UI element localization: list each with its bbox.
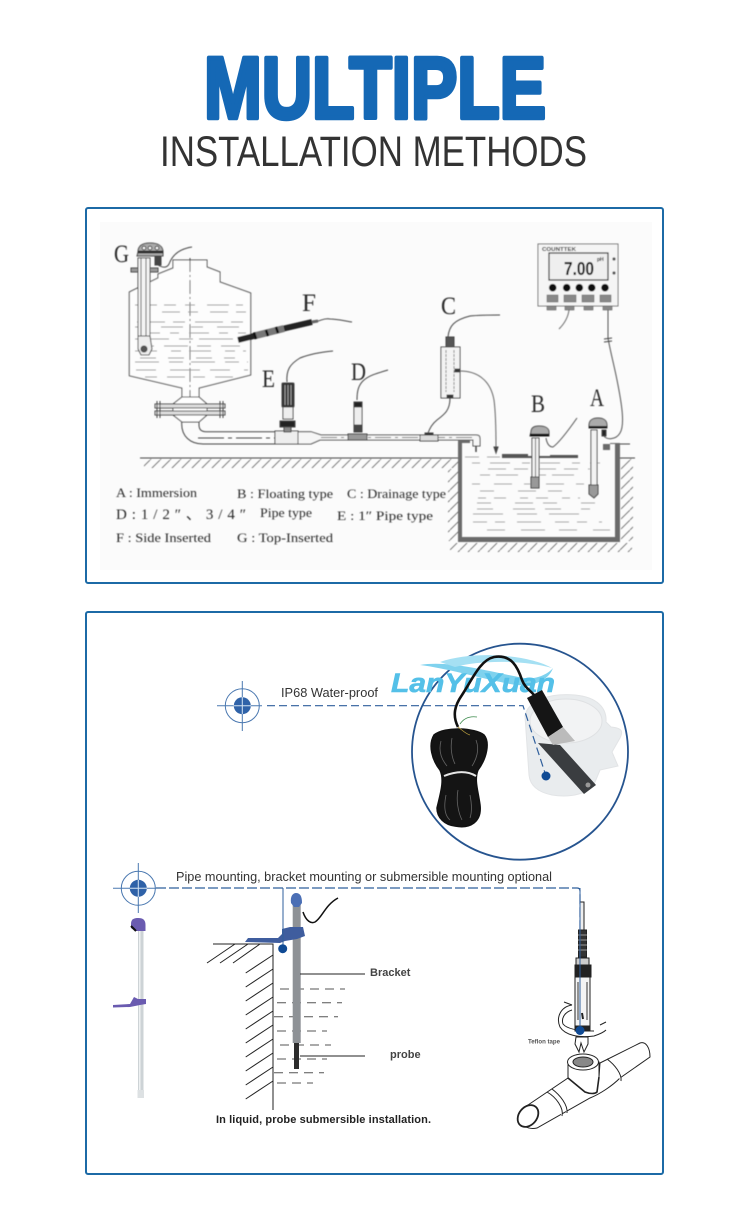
label: E: E [262, 366, 275, 393]
sensor G [131, 243, 192, 355]
dashed leader to dot [267, 706, 546, 776]
icon: crosshair target [113, 863, 156, 913]
legend: installation types: E : 1″ Pipe type [337, 508, 433, 523]
controller meter: pH [597, 257, 604, 263]
ground and water pit [140, 440, 635, 552]
controller meter: 7.00 [564, 259, 594, 279]
logo watermark [391, 655, 555, 698]
legend: installation types: G : Top-Inserted [237, 530, 334, 545]
label: C: C [441, 293, 456, 320]
label: G: G [114, 241, 129, 268]
legend: installation types: F : Side Inserted [116, 530, 212, 545]
caption: In liquid, probe submersible installation. [216, 1114, 431, 1126]
panel: mounting options [86, 612, 663, 1174]
T pipe fitting [513, 1043, 650, 1131]
tank flange and outlet pipe [155, 397, 480, 452]
center diagram: submersible installation [207, 888, 431, 1126]
subheading: installation methods: INSTALLATION METHODS [160, 128, 587, 176]
panel: installation diagram [86, 208, 663, 583]
cable coil [431, 657, 534, 827]
pipe sensor D [348, 359, 388, 440]
label: A: A [590, 385, 604, 412]
callout: pipe or bracket mounting: Pipe mounting, bracket mounting or submersible mounting optional [176, 869, 552, 884]
tank with top-inserted sensor G [114, 241, 251, 420]
label: F: F [302, 290, 316, 317]
probe in beaker [527, 690, 596, 794]
controller meter: COUNTTEK [542, 247, 576, 253]
icon: crosshair target [217, 681, 262, 731]
callout: pipe or bracket mounting [113, 863, 580, 1030]
heading: MULTIPLE: MULTIPLE [204, 40, 546, 137]
label: bracket: Bracket [370, 967, 411, 979]
pipe sensor E [262, 351, 333, 432]
legend: installation types: C : Drainage type [347, 486, 446, 501]
legend: installation types: B : Floating type [237, 486, 333, 501]
legend: installation types: A : Immersion [116, 485, 198, 500]
product photo circle: sensor in beaker [267, 644, 628, 860]
controller meter [538, 244, 618, 329]
label: D: D [351, 359, 366, 386]
logo watermark: LanYuXuan [391, 668, 555, 698]
beaker [525, 695, 622, 796]
title [160, 40, 587, 176]
callout: IP68 water-proof: IP68 Water-proof [281, 685, 378, 700]
drainage sensor C [420, 293, 500, 453]
probe and tape [558, 902, 606, 1052]
legend: installation types [116, 485, 446, 545]
immersion sensor A [589, 310, 623, 498]
floating sensor B [502, 391, 578, 488]
left product: probe with bracket [113, 918, 146, 1098]
label: B: B [531, 391, 545, 418]
legend: installation types: Pipe type [260, 505, 312, 520]
right diagram: threaded pipe installation [513, 888, 650, 1131]
label: teflon tape: Teflon tape [528, 1038, 560, 1046]
side inserted sensor F [238, 290, 352, 340]
label: probe: probe [390, 1049, 421, 1061]
callout: IP68 water-proof [217, 681, 378, 731]
legend: installation types: D:1/2″、3/4″ [116, 507, 246, 523]
